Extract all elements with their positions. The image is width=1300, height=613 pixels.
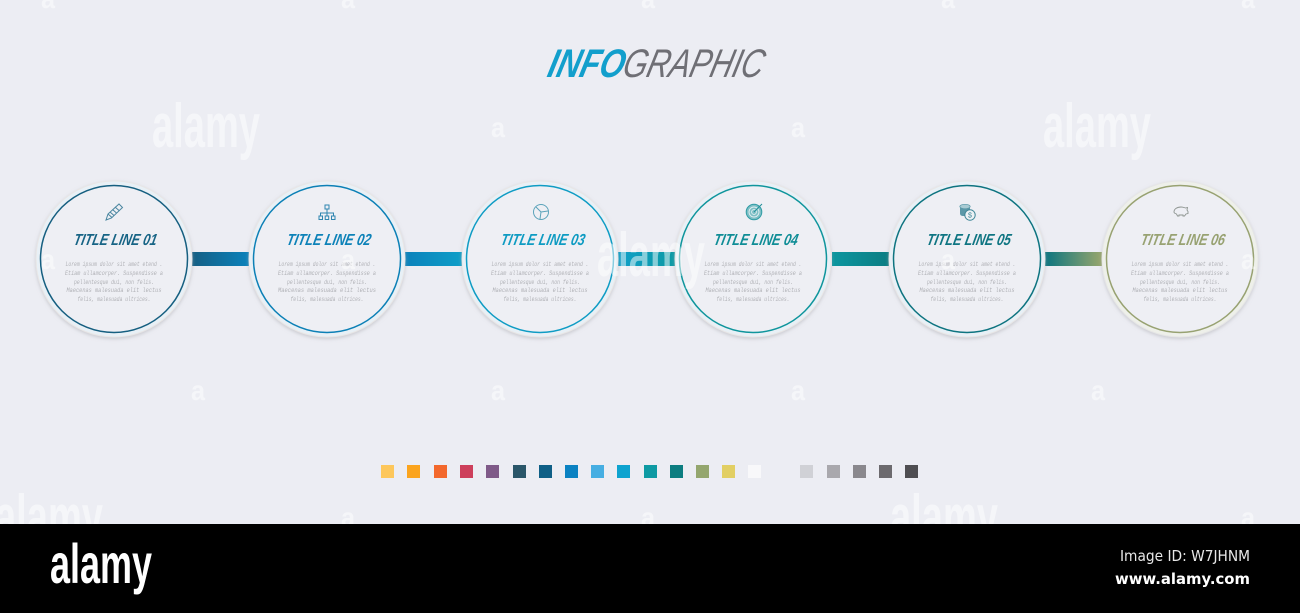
panel: step 03: [462, 181, 618, 337]
body text 01: Maecenas malesuada elit lectus: [66, 287, 162, 294]
icon: pencil: [106, 204, 122, 220]
website: www.alamy.com: [1115, 570, 1250, 588]
panel: step 04: [675, 181, 831, 337]
watermarks: a: [41, 244, 55, 275]
colour palette swatches: [381, 465, 918, 478]
body text 05: Etiam ullamcorper. Suspendisse a: [918, 270, 1016, 277]
body text 06: Lorem ipsum dolor sit amet etend .: [1132, 261, 1228, 268]
watermarks: a: [491, 375, 505, 406]
body text 03: Maecenas malesuada elit lectus: [492, 287, 588, 294]
body text 04: Lorem ipsum dolor sit amet etend .: [704, 261, 802, 268]
body text 03: Lorem ipsum dolor sit amet etend .: [492, 261, 588, 268]
body text 01: felis, malesuada ultrices.: [78, 296, 150, 303]
body text 03: felis, malesuada ultrices.: [504, 296, 576, 303]
icon: coins: $: [968, 212, 972, 220]
body text 01: Lorem ipsum dolor sit amet etend .: [66, 261, 162, 268]
body text 04: felis, malesuada ultrices.: [716, 296, 790, 303]
title line 01: TITLE LINE 01: [72, 231, 159, 249]
footer bar: [0, 524, 1300, 613]
body text 04: Etiam ullamcorper. Suspendisse a: [704, 270, 802, 277]
body text 05: Lorem ipsum dolor sit amet etend .: [918, 261, 1016, 268]
watermarks: alamy: [890, 483, 998, 552]
title line 05: TITLE LINE 05: [925, 231, 1014, 249]
body text 06: Etiam ullamcorper. Suspendisse a: [1131, 270, 1229, 277]
watermarks: a: [1091, 375, 1105, 406]
watermarks: a: [791, 112, 805, 143]
icon: org chart: [319, 205, 335, 220]
body text 01: pellentesque dui, non felis.: [73, 279, 154, 286]
body text 01: [65, 261, 163, 303]
watermarks: alamy: [152, 92, 260, 161]
watermarks: a: [341, 244, 355, 275]
watermarks: a: [791, 375, 805, 406]
body text 06: felis, malesuada ultrices.: [1144, 296, 1216, 303]
body text 03: [491, 261, 589, 303]
body text 01: Etiam ullamcorper. Suspendisse a: [65, 270, 163, 277]
watermarks: a: [1241, 244, 1255, 275]
watermarks: a: [941, 244, 955, 275]
body text 02: pellentesque dui, non felis.: [286, 279, 367, 286]
body text 05: felis, malesuada ultrices.: [930, 296, 1004, 303]
title line 02: TITLE LINE 02: [285, 231, 373, 249]
watermarks: alamy: [0, 483, 103, 552]
title: [544, 41, 771, 86]
body text 04: Maecenas malesuada elit lectus: [706, 287, 801, 294]
body text 02: [278, 261, 376, 303]
title: GRAPHIC: [619, 41, 771, 86]
footer logo: alamy: [50, 532, 152, 595]
icon: piggy bank: [1174, 207, 1188, 216]
body text 04: pellentesque dui, non felis.: [712, 279, 793, 286]
panel: step 06: [1102, 181, 1258, 337]
body text 05: Maecenas malesuada elit lectus: [920, 287, 1015, 294]
body text 02: Lorem ipsum dolor sit amet etend .: [278, 261, 376, 268]
image id: Image ID: W7JHNM: [1120, 547, 1250, 565]
panel: step 02: [249, 181, 405, 337]
icon: pie chart: [534, 204, 548, 220]
body text 03: Etiam ullamcorper. Suspendisse a: [491, 270, 589, 277]
body text 02: felis, malesuada ultrices.: [290, 296, 364, 303]
icon: coins: [960, 204, 975, 220]
title line 03: TITLE LINE 03: [499, 231, 587, 249]
watermarks: a: [641, 502, 655, 533]
watermarks: a: [1241, 502, 1255, 533]
icon: target: [746, 204, 762, 220]
watermarks: a: [341, 502, 355, 533]
title line 06: TITLE LINE 06: [1139, 231, 1228, 249]
body text 06: [1131, 261, 1229, 303]
body text 06: pellentesque dui, non felis.: [1139, 279, 1220, 286]
body text 02: Etiam ullamcorper. Suspendisse a: [278, 270, 376, 277]
title line 04: TITLE LINE 04: [712, 231, 800, 249]
watermarks: alamy: [597, 221, 705, 290]
watermarks: a: [191, 375, 205, 406]
body text 05: pellentesque dui, non felis.: [926, 279, 1007, 286]
body text 03: pellentesque dui, non felis.: [499, 279, 580, 286]
connector bars: [192, 252, 1102, 266]
title: INFO: [544, 41, 631, 86]
body text 04: [704, 261, 802, 303]
panel: step 05: [889, 181, 1045, 337]
watermarks: a: [491, 112, 505, 143]
watermarks: alamy: [1043, 92, 1151, 161]
panel: step 01: [36, 181, 192, 337]
body text 02: Maecenas malesuada elit lectus: [278, 287, 376, 294]
body text 05: [918, 261, 1016, 303]
body text 06: Maecenas malesuada elit lectus: [1132, 287, 1228, 294]
